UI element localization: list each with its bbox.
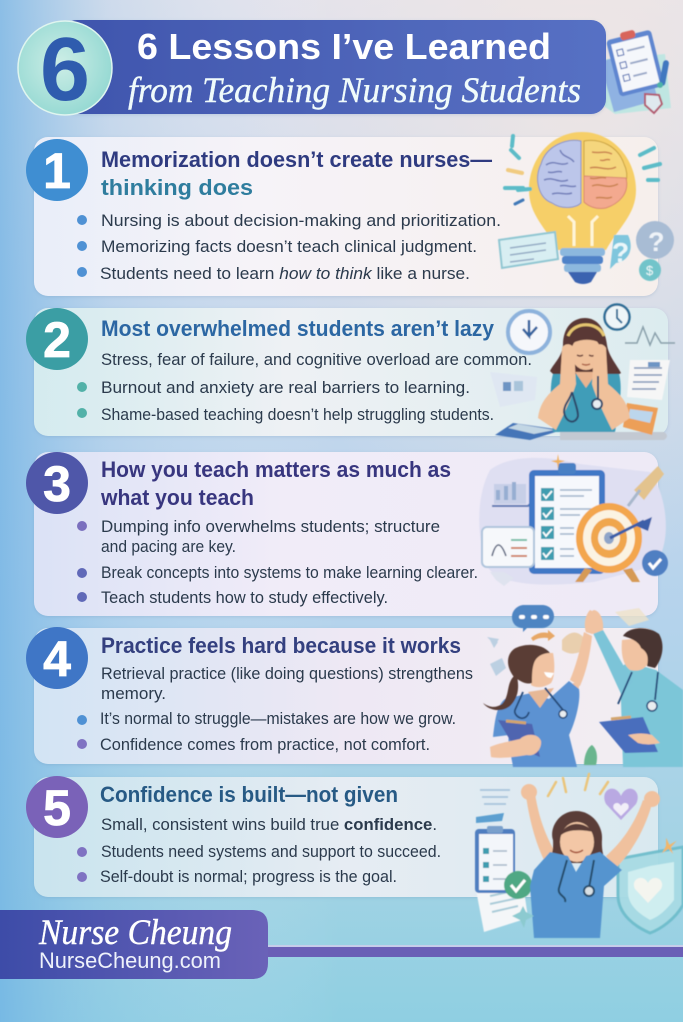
lesson 4 number badge bbox=[26, 627, 88, 689]
header banner bbox=[18, 20, 671, 120]
big number 6 badge bbox=[18, 20, 112, 120]
lesson 3 heading bbox=[100, 457, 451, 510]
lesson 5 heading: Confidence is built—not given bbox=[100, 782, 398, 807]
lesson 1 heading: thinking does bbox=[101, 175, 253, 200]
lesson 5 number badge bbox=[26, 776, 88, 838]
illustration: lightbulb with brain bbox=[499, 132, 674, 284]
title line 2: from Teaching Nursing Students bbox=[128, 70, 581, 110]
lesson 3 heading: How you teach matters as much as bbox=[101, 457, 451, 482]
big number 6 badge: 6 bbox=[40, 20, 90, 120]
lesson 5 card bbox=[34, 777, 658, 897]
lesson 1 bullets bbox=[77, 211, 501, 283]
website: NurseCheung.com bbox=[39, 948, 221, 973]
panel: lesson 3 bbox=[26, 452, 668, 616]
lesson 3 number badge: 3 bbox=[43, 456, 71, 512]
lesson 1 bullets: Students need to learn how to think like a nurse. bbox=[100, 264, 470, 283]
lesson 4 text and bullets: Confidence comes from practice, not comfort. bbox=[100, 735, 430, 754]
lesson 2 text and bullets: Stress, fear of failure, and cognitive overload are common. bbox=[101, 350, 532, 369]
lesson 4 text and bullets: memory. bbox=[101, 684, 166, 703]
lesson 4 card bbox=[34, 628, 658, 764]
illustration: checklist clipboard and target bbox=[479, 454, 668, 586]
lesson 3 card bbox=[34, 452, 658, 616]
illustration: celebrating nurse with shield bbox=[475, 774, 683, 938]
illustration: overwhelmed nurse at desk bbox=[490, 304, 675, 440]
lesson 2 number badge: 2 bbox=[43, 312, 71, 368]
lesson 4 text and bullets: Retrieval practice (like doing questions) strengthens bbox=[101, 664, 473, 683]
lesson 1 bullets: Nursing is about decision-making and prioritization. bbox=[101, 211, 501, 230]
lesson 3 bullets: Break concepts into systems to make learning clearer. bbox=[101, 563, 478, 582]
lesson 3 number badge bbox=[26, 452, 88, 514]
title bar bbox=[62, 20, 606, 114]
lesson 4 text and bullets: It’s normal to struggle—mistakes are how we grow. bbox=[100, 709, 456, 728]
illustration: nurses high-five bbox=[483, 605, 683, 767]
panel: lesson 4 bbox=[26, 605, 683, 767]
lesson 1 bullets: Memorizing facts doesn’t teach clinical judgment. bbox=[101, 237, 477, 256]
speech bubble and arrow bbox=[512, 605, 555, 641]
lesson 1 card bbox=[34, 137, 658, 296]
lesson 5 text and bullets bbox=[77, 815, 441, 886]
panel: lesson 2 bbox=[26, 304, 675, 440]
lesson 4 number badge: 4 bbox=[43, 631, 71, 687]
panel: lesson 1 bbox=[26, 132, 674, 296]
footer stripe bbox=[260, 945, 683, 957]
lesson 2 number badge bbox=[26, 308, 88, 370]
lesson 3 bullets: and pacing are key. bbox=[101, 537, 236, 556]
lesson 3 heading: what you teach bbox=[100, 485, 254, 510]
brand name: Nurse Cheung bbox=[38, 912, 232, 952]
illustration: lightbulb with brain: ? bbox=[612, 237, 629, 268]
icon: clipboard and pen bbox=[597, 26, 671, 114]
lesson 2 heading: Most overwhelmed students aren’t lazy bbox=[101, 316, 494, 341]
panel: lesson 5 bbox=[26, 774, 683, 938]
lesson 2 text and bullets bbox=[77, 350, 532, 424]
lesson 2 text and bullets: Burnout and anxiety are real barriers to learning. bbox=[101, 378, 470, 397]
lesson 1 heading: Memorization doesn’t create nurses— bbox=[101, 147, 492, 172]
lesson 5 number badge: 5 bbox=[43, 780, 71, 836]
lesson 2 card bbox=[34, 308, 668, 436]
lesson 4 heading: Practice feels hard because it works bbox=[101, 633, 461, 658]
lesson 2 text and bullets: Shame-based teaching doesn’t help struggling students. bbox=[101, 405, 494, 424]
lesson 4 text and bullets bbox=[77, 664, 473, 754]
lesson 5 text and bullets: Students need systems and support to succeed. bbox=[101, 842, 441, 861]
lesson 3 bullets: Teach students how to study effectively. bbox=[101, 588, 388, 607]
lesson 5 text and bullets: Small, consistent wins build true confidence. bbox=[101, 815, 437, 834]
illustration: lightbulb with brain: ? bbox=[648, 227, 664, 257]
lesson 3 bullets: Dumping info overwhelms students; structure bbox=[101, 517, 440, 536]
illustration: lightbulb with brain: $ bbox=[646, 263, 654, 278]
lesson 1 heading bbox=[101, 147, 492, 200]
footer brand tag bbox=[0, 910, 268, 979]
lesson 1 number badge: 1 bbox=[43, 143, 71, 199]
lesson 3 bullets bbox=[77, 517, 478, 607]
title line 1: 6 Lessons I’ve Learned bbox=[137, 26, 551, 67]
lesson 5 text and bullets: Self-doubt is normal; progress is the goal. bbox=[100, 867, 397, 886]
lesson 1 number badge bbox=[26, 139, 88, 201]
